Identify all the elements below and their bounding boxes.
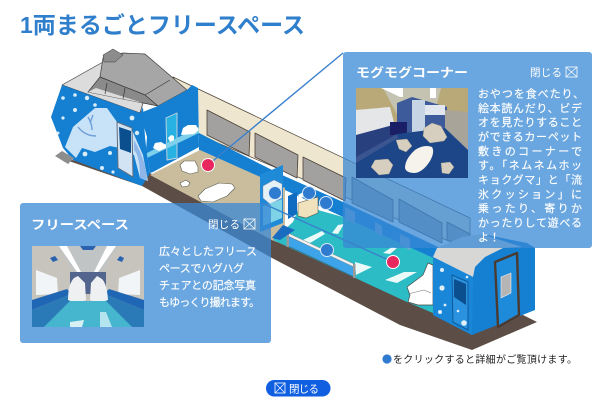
wall lockers xyxy=(345,207,410,250)
panel text: ペースでハグハグ xyxy=(159,261,244,275)
panel heading: フリースペース xyxy=(31,218,129,232)
title: 1両まるごとフリースペース xyxy=(20,12,305,38)
hotspot red: carpet xyxy=(202,158,214,172)
back bench xyxy=(288,191,318,219)
panel text: 敷きのコーナーで xyxy=(478,144,582,158)
panel text: かったりして遊べる xyxy=(478,216,582,230)
panel text: 絵本読んだり、ビデ xyxy=(478,101,582,115)
panel text xyxy=(478,88,584,244)
close button: 閉じる xyxy=(289,384,319,396)
hotspot connector xyxy=(208,53,343,165)
panel text: す。「ネムネムホッ xyxy=(478,159,582,172)
seat bear xyxy=(407,263,433,305)
legend note: をクリックすると詳細がご覧頂けます。 xyxy=(393,353,577,366)
panel: free space xyxy=(20,203,271,343)
train illustration xyxy=(51,49,537,350)
panel text xyxy=(159,245,260,309)
hotspot red: free space xyxy=(386,256,400,268)
front bench xyxy=(272,225,356,278)
train windows xyxy=(207,110,470,250)
rear car xyxy=(433,234,535,335)
panel heading: モグモグコーナー xyxy=(356,65,468,80)
train base shadow xyxy=(60,158,537,350)
back wall upper band xyxy=(173,77,470,250)
panel text: 広々としたフリース xyxy=(159,245,257,258)
panel text: ができるカーペット xyxy=(478,130,582,144)
photo: carpet corner xyxy=(356,88,468,178)
panel text: よ！ xyxy=(478,231,500,244)
floor: carpet corner xyxy=(150,150,285,243)
close link: 閉じる xyxy=(208,219,240,231)
front car side bulkhead xyxy=(140,85,199,173)
front car cab xyxy=(51,85,150,186)
panel text: もゆっくり撮れます。 xyxy=(159,295,260,309)
panel text: おやつを食べたり、 xyxy=(478,88,584,100)
panel text: キョクグマ」と「流 xyxy=(478,172,582,186)
close link xyxy=(208,219,255,231)
close button xyxy=(266,380,330,396)
close link xyxy=(530,67,577,79)
back wall lower band xyxy=(199,133,470,275)
free space connector xyxy=(262,203,393,262)
panel: mogumogu corner xyxy=(343,52,592,248)
panel text: 氷クッション」に xyxy=(478,188,582,201)
front car roof xyxy=(62,49,187,113)
floor: free space xyxy=(273,205,440,316)
partition wall xyxy=(260,165,283,232)
close link: 閉じる xyxy=(530,67,562,79)
panel text: オを見たりすること xyxy=(478,116,582,129)
panel text: チェアとの記念写真 xyxy=(159,278,256,292)
polar bear cushions xyxy=(180,161,235,202)
photo: free space interior xyxy=(32,246,144,327)
floor ice decorations xyxy=(303,224,417,283)
panel text: 乗ったり、寄りか xyxy=(478,202,582,215)
hotspots blue xyxy=(268,186,334,256)
